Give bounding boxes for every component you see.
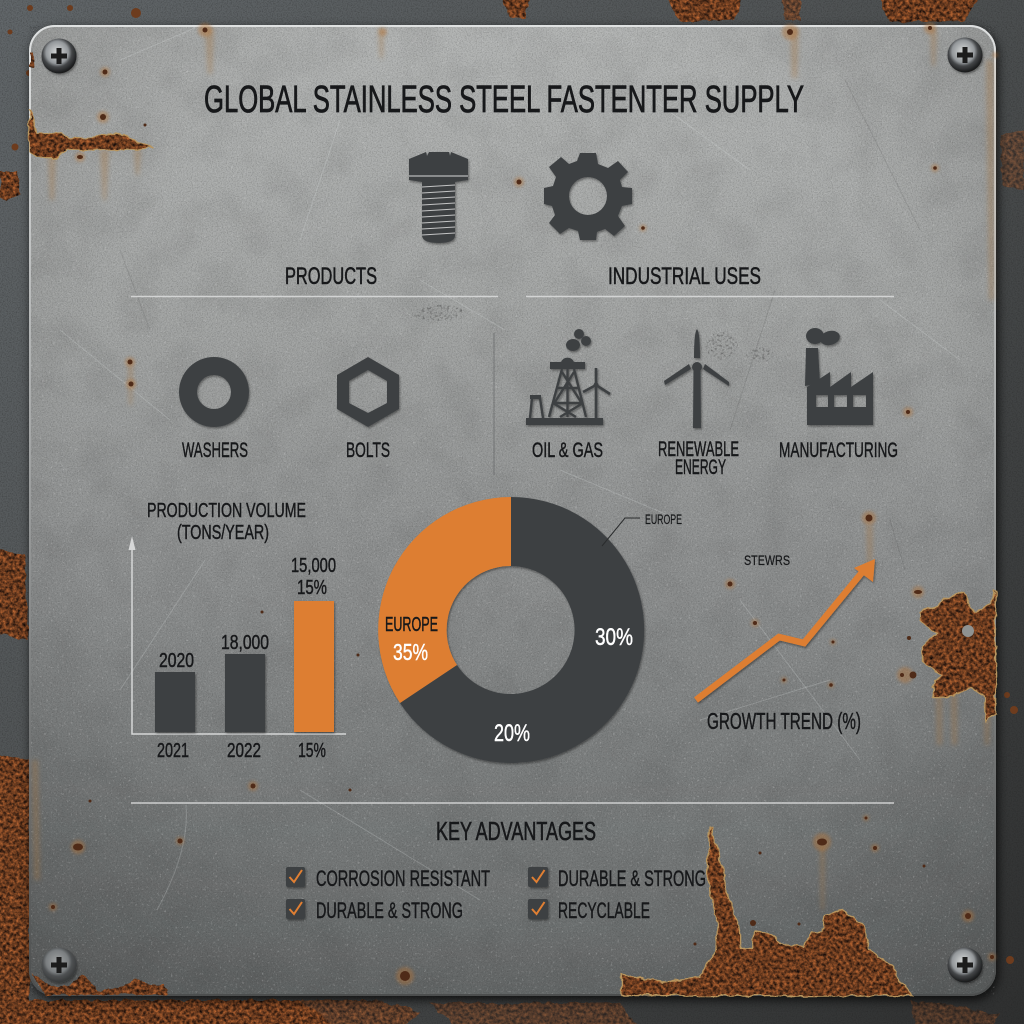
heading: products: PRODUCTS xyxy=(285,263,377,290)
label: renewable energy: ENERGY xyxy=(675,456,726,479)
item: recyclable xyxy=(528,898,650,923)
item: durable and strong, right xyxy=(528,866,706,891)
icon: gear xyxy=(544,153,632,240)
screw: bottom left xyxy=(42,948,76,982)
donut chart: EUROPE xyxy=(385,614,438,636)
small label: STEWRS xyxy=(744,552,790,568)
donut chart: 35% xyxy=(393,639,428,665)
screw: top left xyxy=(42,38,76,74)
bar chart: 18,000 xyxy=(221,632,269,654)
icon: hex bolt xyxy=(337,357,399,427)
item: durable and strong, right: DURABLE & STRONG xyxy=(558,866,706,891)
chart heading: production volume xyxy=(147,499,306,544)
heading: key advantages: KEY ADVANTAGES xyxy=(436,816,596,846)
icon: factory xyxy=(805,328,873,425)
bar chart: 2022 xyxy=(227,740,261,762)
label: oil and gas: OIL & GAS xyxy=(532,439,603,462)
item: recyclable: RECYCLABLE xyxy=(558,898,650,923)
icon: wind turbine xyxy=(664,329,729,428)
label: washers: WASHERS xyxy=(182,439,248,462)
heading: industrial uses: INDUSTRIAL USES xyxy=(608,263,761,290)
label: manufacturing: MANUFACTURING xyxy=(779,439,898,462)
item: durable and strong, left xyxy=(286,898,463,923)
label: growth trend: GROWTH TREND (%) xyxy=(707,708,861,734)
donut chart xyxy=(378,497,682,763)
screw: top right xyxy=(948,38,982,72)
label: bolts: BOLTS xyxy=(346,439,390,462)
label: renewable energy xyxy=(658,438,739,479)
chart heading: production volume: (TONS/YEAR) xyxy=(177,521,269,544)
bar chart xyxy=(128,536,346,762)
item: durable and strong, left: DURABLE & STRONG xyxy=(316,898,463,923)
donut chart: 30% xyxy=(595,624,633,651)
chart heading: production volume: PRODUCTION VOLUME xyxy=(147,499,306,522)
growth trend arrow xyxy=(696,559,875,700)
bar chart: 2021 xyxy=(157,740,189,762)
checklist: key advantages xyxy=(286,866,706,923)
item: corrosion resistant: CORROSION RESISTANT xyxy=(316,866,490,891)
donut chart: EUROPE xyxy=(645,511,682,527)
screw: bottom right xyxy=(948,948,982,982)
donut chart: 20% xyxy=(494,720,530,747)
bar chart: 15,000 xyxy=(291,555,336,577)
icon: oil rig xyxy=(526,329,610,425)
item: corrosion resistant xyxy=(286,866,490,891)
label: renewable energy: RENEWABLE xyxy=(658,438,739,461)
bar chart: 2020 xyxy=(159,650,194,672)
bar chart: 15% xyxy=(297,577,327,599)
icon: washer xyxy=(179,357,249,427)
icon: bolt xyxy=(409,152,468,243)
bar chart: 15% xyxy=(298,740,326,762)
